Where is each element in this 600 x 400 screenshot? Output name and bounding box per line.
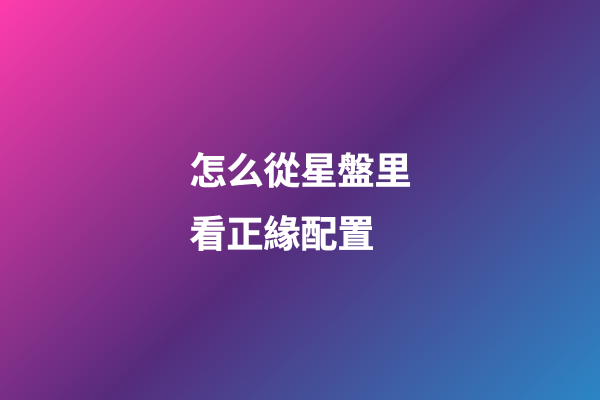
title — [190, 151, 412, 255]
title line 1: 怎么從星盤里 — [190, 151, 412, 192]
title line 2: 看正緣配置 — [190, 214, 374, 255]
